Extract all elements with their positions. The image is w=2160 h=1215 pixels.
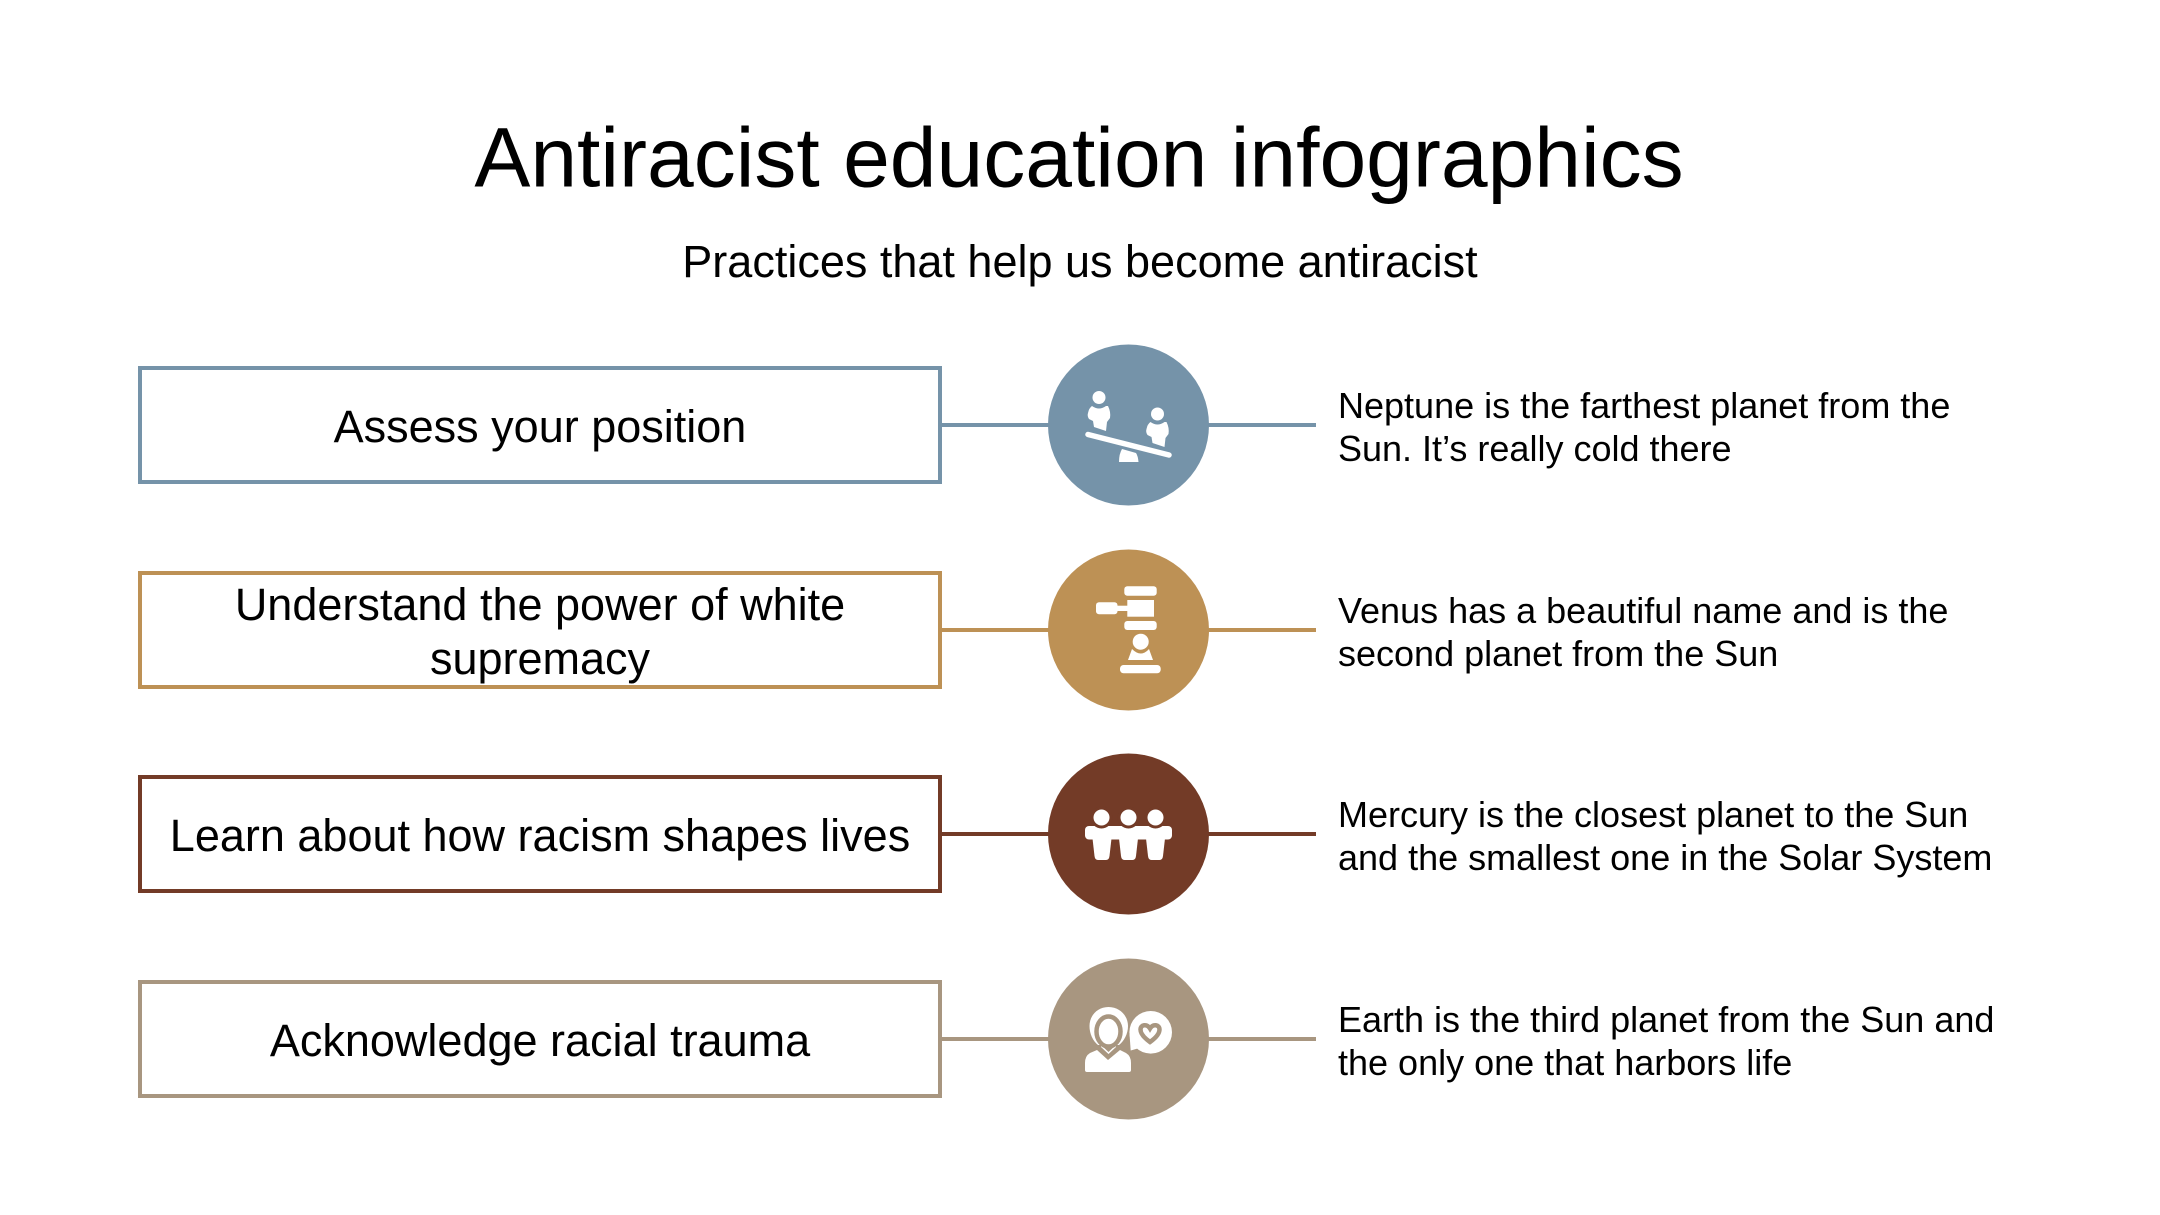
row 2: understand white supremacy (140, 550, 1948, 710)
description 3: and the smallest one in the Solar System (1338, 837, 1992, 878)
label box 4: Acknowledge racial trauma (270, 1015, 811, 1066)
label box 2: Understand the power of white (235, 579, 845, 630)
label box 3 (140, 777, 940, 891)
connector line 4 (941, 1037, 1316, 1041)
connector line 3 (941, 832, 1316, 836)
row 1: assess your position (140, 344, 1950, 506)
subtitle: Practices that help us become antiracist (682, 236, 1478, 287)
row 3: learn about racism (140, 754, 1992, 914)
row 4: acknowledge racial trauma (140, 958, 1994, 1120)
connector line 2 (941, 628, 1316, 632)
description 1: Sun. It’s really cold there (1338, 428, 1732, 469)
circle badge 2 with gavel icon (1048, 550, 1209, 710)
description 4: Earth is the third planet from the Sun and (1338, 999, 1994, 1040)
description 2: second planet from the Sun (1338, 633, 1778, 674)
description 2: Venus has a beautiful name and is the (1338, 590, 1948, 631)
description 4 (1338, 999, 1994, 1083)
circle badge 4 with person and heart icon (1048, 958, 1209, 1120)
label box 1 (140, 368, 940, 482)
connector line 1 (941, 423, 1316, 427)
description 3 (1338, 794, 1992, 878)
circle badge 1 with seesaw icon (1048, 344, 1209, 506)
description 1 (1338, 385, 1950, 469)
description 2 (1338, 590, 1948, 674)
circle badge 3 with people icon (1048, 754, 1209, 914)
label box 1: Assess your position (334, 401, 746, 452)
label box 4 (140, 982, 940, 1096)
title: Antiracist education infographics (474, 110, 1684, 204)
description 3: Mercury is the closest planet to the Sun (1338, 794, 1968, 835)
label box 2: supremacy (430, 633, 651, 684)
label box 2 (140, 573, 940, 687)
label box 3: Learn about how racism shapes lives (170, 810, 910, 861)
description 1: Neptune is the farthest planet from the (1338, 385, 1950, 426)
description 4: the only one that harbors life (1338, 1042, 1792, 1083)
